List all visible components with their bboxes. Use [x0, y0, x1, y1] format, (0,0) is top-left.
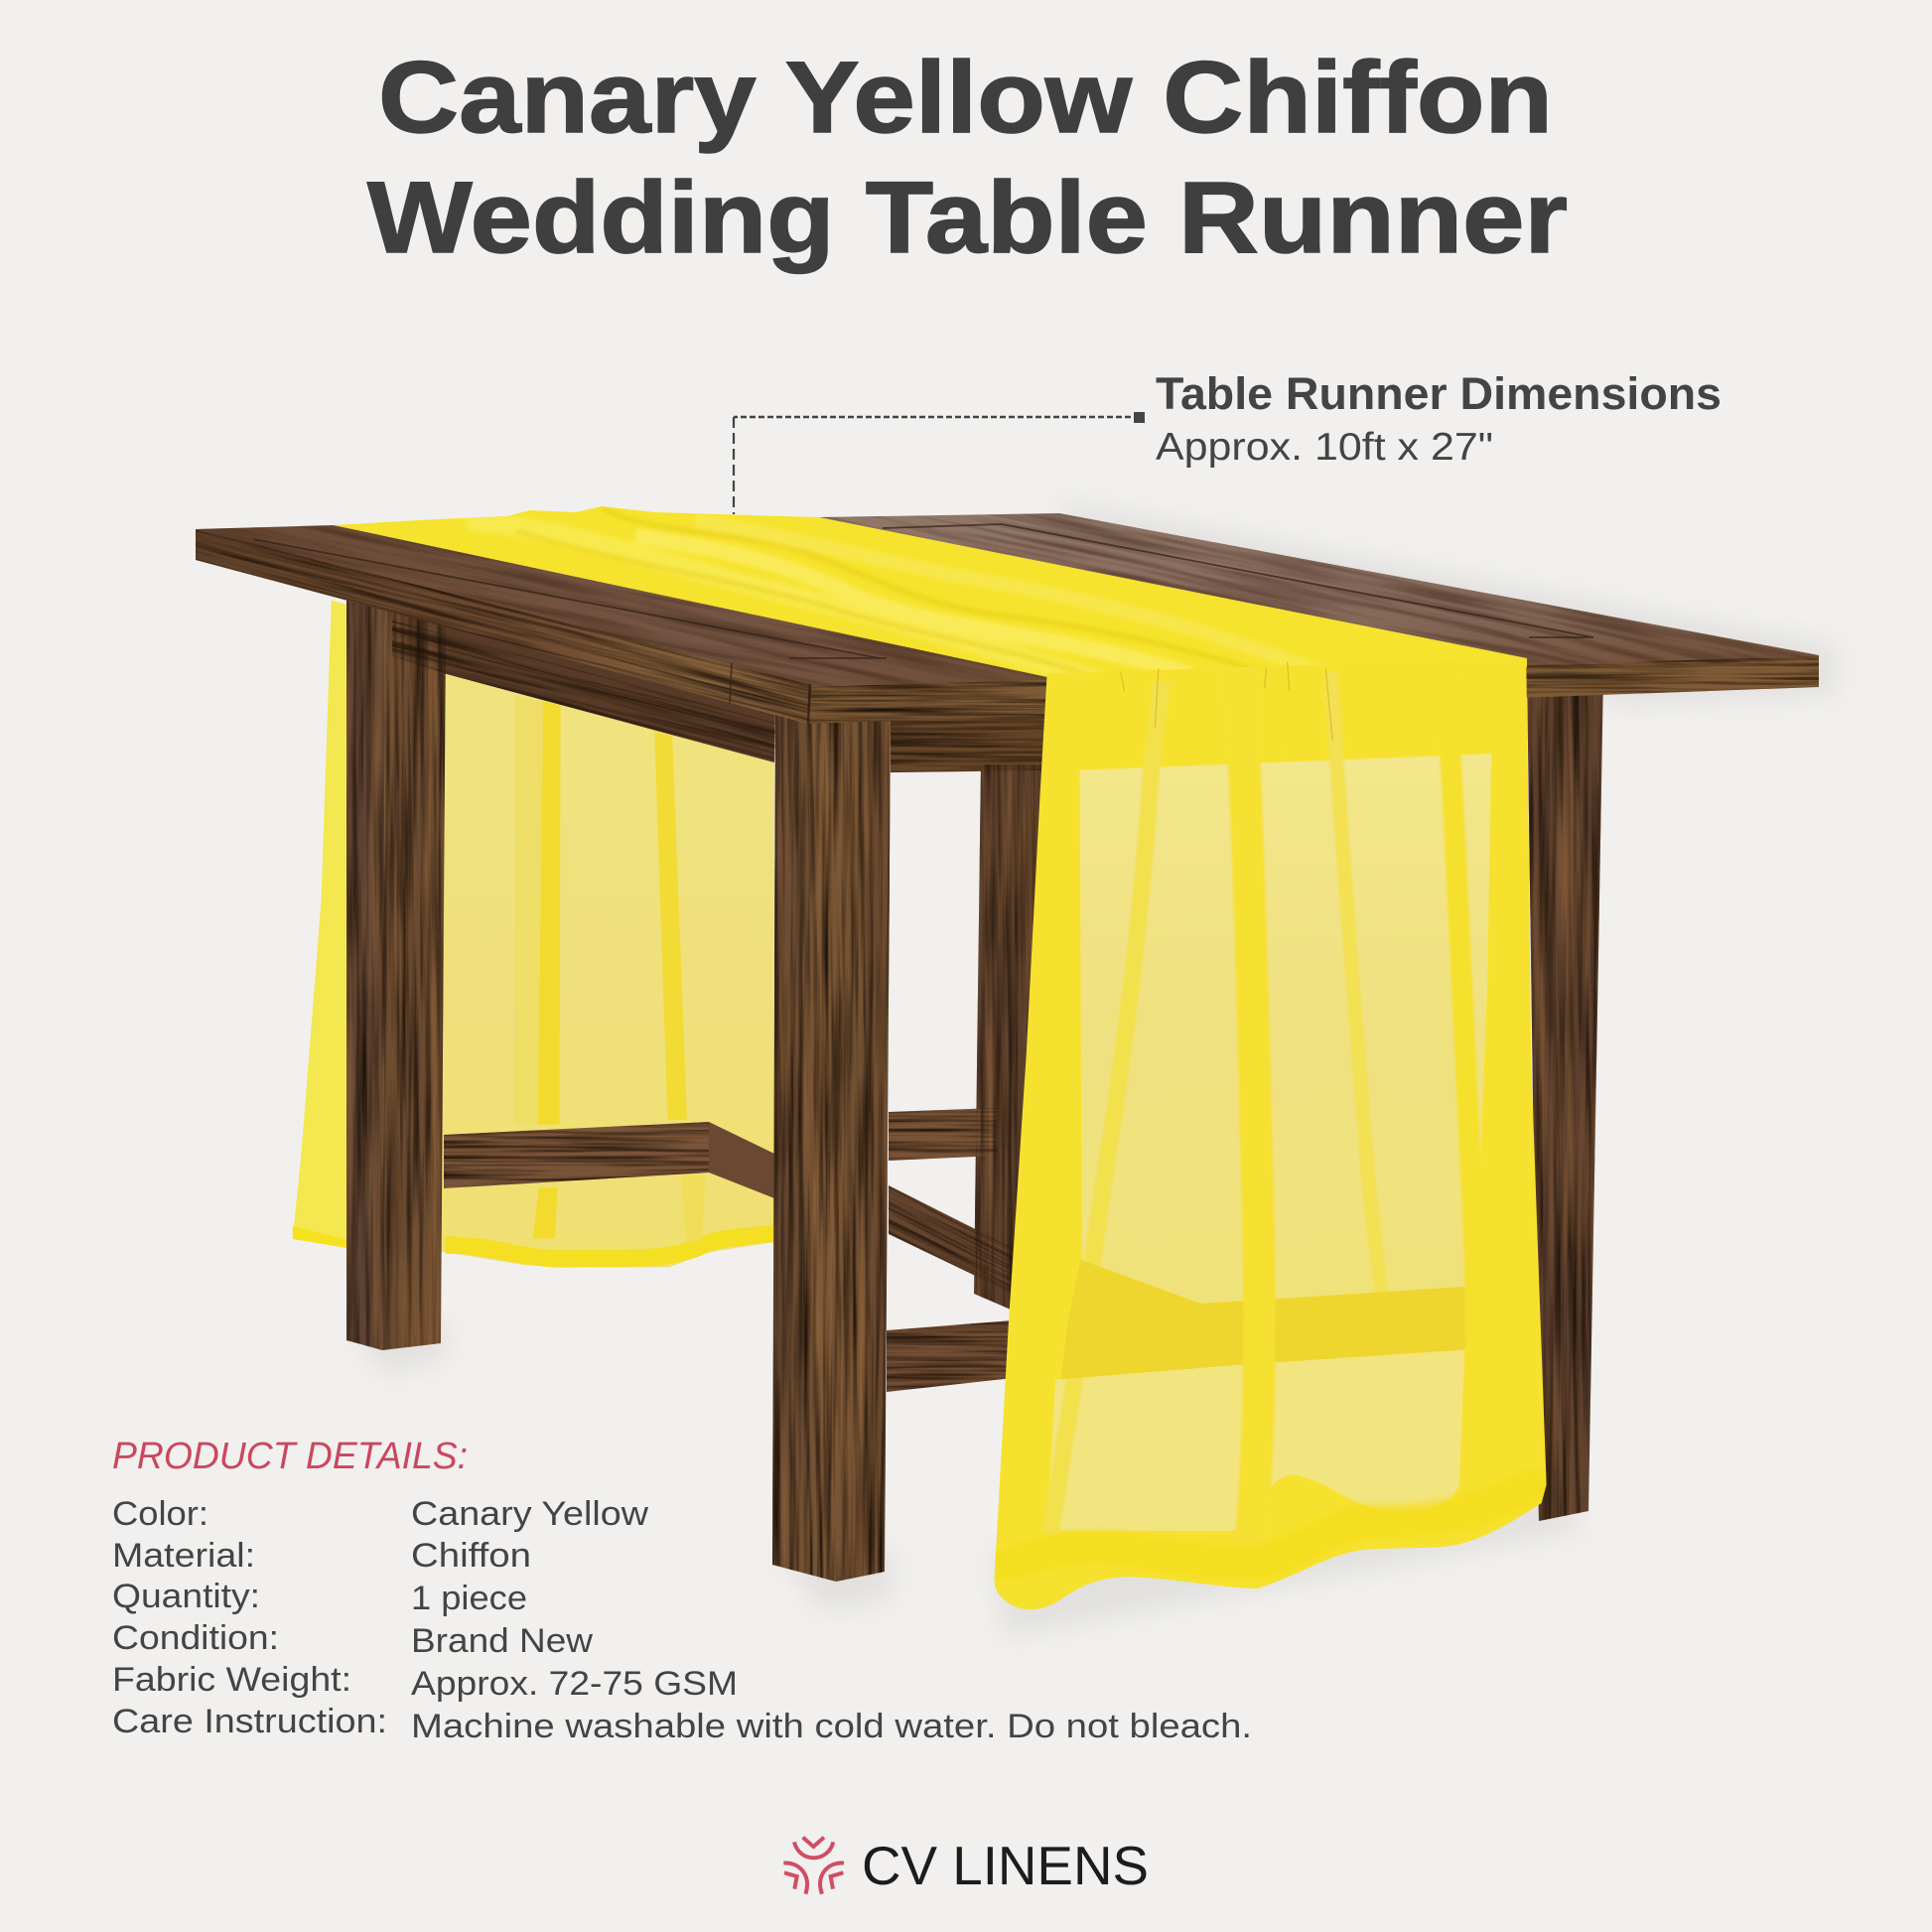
detail values: Chiffon: [411, 1537, 531, 1575]
detail labels: Quantity:: [112, 1578, 260, 1615]
wide pleats: [1239, 661, 1476, 1544]
runner folds: [467, 508, 1330, 685]
long left stretcher: [444, 1122, 709, 1188]
sheer lower panel: [1047, 1349, 1465, 1531]
front leg: [772, 715, 891, 1582]
left edge of table top: [196, 529, 810, 724]
detail values: Machine washable with cold water. Do not bleach.: [411, 1708, 1252, 1745]
front drape of runner: [994, 658, 1547, 1609]
thin pleats: [1050, 671, 1381, 1534]
grain on sloped left edge and apron: [196, 529, 810, 762]
sheer panels and pleats: [995, 661, 1547, 1571]
left apron: [392, 604, 775, 762]
grain on diagonal stretcher: [889, 1186, 1013, 1293]
detail labels: Condition:: [112, 1619, 279, 1657]
top surface behind runner: [819, 513, 1819, 670]
detail values: Canary Yellow: [411, 1495, 648, 1533]
pleat creases: [1120, 661, 1332, 741]
title: Wedding Table Runner: [367, 161, 1568, 274]
dimension callout: [734, 368, 1722, 514]
table top: [196, 513, 1819, 724]
back-right leg: [1527, 675, 1603, 1521]
lower front stretcher: [887, 1320, 1013, 1392]
detail values: 1 piece: [411, 1580, 527, 1617]
cross stretcher: [709, 1122, 774, 1198]
diagonal stretcher: [889, 1185, 1013, 1294]
detail labels: Fabric Weight:: [112, 1661, 351, 1699]
rear stretcher: [889, 1108, 998, 1161]
detail values: Brand New: [411, 1622, 593, 1660]
leader line: [734, 416, 1140, 418]
bottom hem: [995, 1478, 1547, 1571]
detail labels: [112, 1495, 387, 1740]
detail labels: Color:: [112, 1495, 208, 1533]
brand logo: [783, 1835, 1149, 1896]
callout value: Approx. 10ft x 27": [1156, 426, 1493, 469]
title: [367, 41, 1568, 274]
detail labels: Care Instruction:: [112, 1703, 387, 1740]
stretcher seen through sheer: [1061, 1260, 1475, 1379]
product details: [112, 1436, 1252, 1745]
product photo: table with chiffon runner: [196, 506, 1819, 1610]
details heading: PRODUCT DETAILS:: [112, 1436, 468, 1477]
leader end marker: [1134, 412, 1145, 423]
front apron: [891, 711, 1052, 772]
plank grooves: [253, 524, 1593, 724]
detail labels: Material:: [112, 1537, 255, 1575]
brand name: CV LINENS: [862, 1835, 1149, 1896]
top surface before runner: [196, 525, 1047, 690]
drape base: [994, 658, 1547, 1609]
grain on table top: [197, 513, 1819, 690]
back drape of runner seen behind the table: [293, 601, 774, 1268]
back-middle leg: [974, 764, 1047, 1313]
runner lying on the table top: [334, 506, 1527, 685]
front edge of table top: [808, 656, 1819, 724]
detail values: [411, 1495, 1252, 1745]
detail values: Approx. 72-75 GSM: [411, 1665, 738, 1703]
wood grain on legs: [338, 596, 1618, 1588]
title: Canary Yellow Chiffon: [378, 41, 1553, 154]
sheer upper panel: [1080, 754, 1491, 1304]
back-left leg: [346, 596, 446, 1350]
icon: CV Linens mark: [783, 1838, 844, 1894]
wood frame: back legs, stretchers, aprons, front leg: [346, 596, 1603, 1582]
grain on front edge and level rails: [437, 650, 1827, 1400]
table soft shadow: [347, 501, 1837, 1638]
callout heading: Table Runner Dimensions: [1156, 368, 1722, 419]
